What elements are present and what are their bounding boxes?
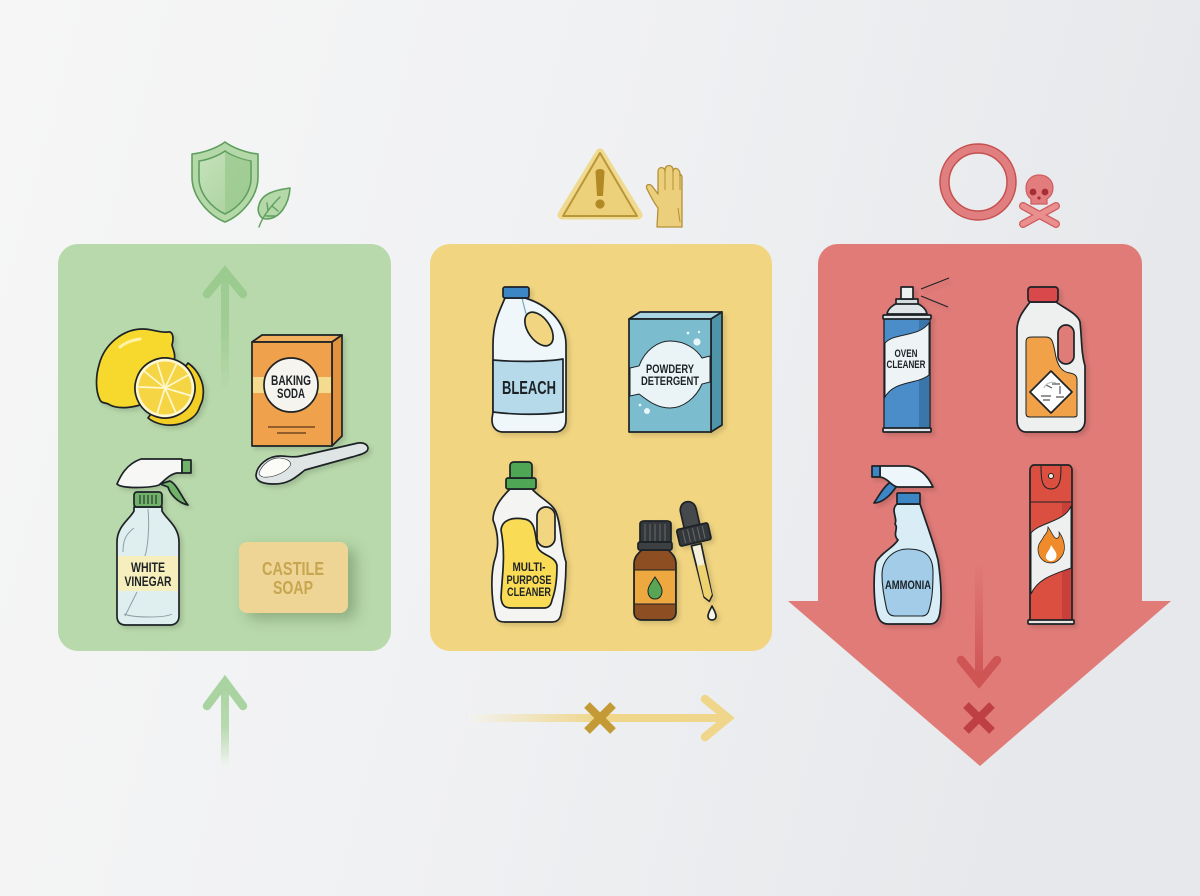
arrow: yellow blocked arrow: [468, 699, 728, 737]
icon: prohibition ring: [944, 148, 1012, 216]
arrow: inner down arrow: [961, 565, 997, 682]
icon: corrosive chemical jug: [1017, 287, 1085, 432]
icon: white vinegar spray bottle: VINEGAR: [124, 573, 172, 589]
icon: multi-purpose cleaner bottle: [492, 462, 566, 622]
icon: castile soap: [239, 542, 348, 613]
icon: yellow x: [587, 705, 613, 731]
icon: multi-purpose cleaner bottle: CLEANER: [507, 587, 552, 599]
icon: leaf: [258, 188, 290, 227]
icon: lemon: [96, 329, 205, 428]
icon: flammable aerosol: [1028, 465, 1074, 624]
icon: white vinegar spray bottle: [117, 459, 191, 625]
icon: powdery detergent box: DETERGENT: [641, 374, 700, 388]
icon: ammonia spray bottle: AMMONIA: [885, 580, 931, 592]
icon: essential oil bottle and dropper: [634, 498, 725, 620]
icon: castile soap: SOAP: [273, 577, 313, 598]
icon: skull and crossbones: [1023, 175, 1056, 224]
icon: castile soap: CASTILE: [262, 558, 324, 579]
icon: green shield: [192, 142, 258, 222]
icon: bleach bottle: BLEACH: [502, 378, 556, 398]
icon: oven cleaner aerosol: [883, 278, 949, 432]
panel: safe cleaners: [58, 244, 391, 651]
arrow: green up arrow below panel: [207, 682, 243, 766]
icon: red x: [966, 705, 992, 731]
icon: powdery detergent box: POWDERY: [646, 362, 694, 376]
icon: powdery detergent box: [629, 312, 722, 432]
icon: bleach bottle: [492, 287, 566, 432]
icon: warning triangle: [562, 153, 638, 216]
icon: ammonia spray bottle: [872, 466, 941, 624]
icon: baking soda box: SODA: [277, 385, 305, 401]
panel: dangerous cleaners down arrow: [788, 244, 1171, 766]
icon: oven cleaner aerosol: OVEN: [894, 348, 918, 360]
icon: multi-purpose cleaner bottle: PURPOSE: [506, 575, 552, 587]
panel: caution cleaners: [430, 244, 772, 651]
icon: white vinegar spray bottle: WHITE: [131, 559, 165, 575]
icon: spoon with baking soda: [256, 443, 368, 484]
arrow: inner up arrow: [207, 272, 243, 392]
icon: rubber glove: [646, 166, 682, 227]
icon: baking soda box: BAKING: [271, 372, 311, 388]
icon: baking soda box: [252, 335, 342, 446]
icon: oven cleaner aerosol: CLEANER: [886, 359, 926, 371]
icon: multi-purpose cleaner bottle: MULTI-: [512, 562, 546, 574]
